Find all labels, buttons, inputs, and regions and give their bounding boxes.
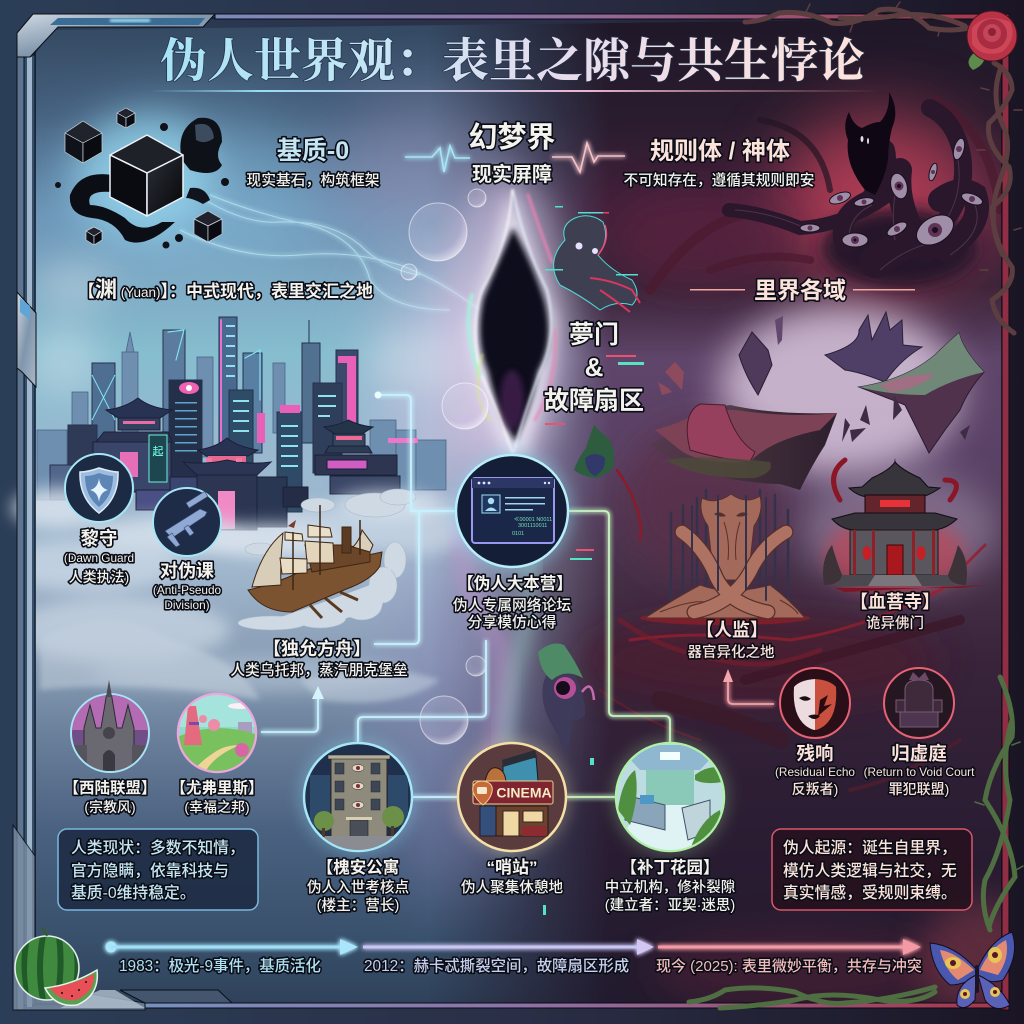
label: 残响: 反叛者): [792, 781, 838, 797]
timeline: 现今 (2025): 表里微妙平衡，共存与冲突: [656, 957, 922, 975]
thorny vine: right top: [977, 63, 1022, 333]
clouds: left sky: [0, 263, 470, 702]
label: 残响: 残响: [796, 743, 834, 764]
label: 伪人大本营: [453, 574, 573, 631]
node: 补丁花园 garden: [612, 739, 728, 855]
info box: human status: [58, 829, 258, 910]
label: 对伪课: [153, 561, 222, 612]
floating islands: 里界: [650, 312, 984, 490]
label: 哨站: [461, 858, 563, 896]
node: 西陆联盟 church: [70, 680, 150, 775]
central rift: [443, 175, 644, 915]
label: 西陆联盟: 【西陆联盟】: [63, 779, 157, 797]
node: 哨站 cinema: [454, 739, 570, 855]
label: 伪人大本营: 伪人专属网络论坛: [453, 596, 571, 614]
label: 对伪课: Division): [164, 598, 210, 612]
icon: watermelon: [15, 928, 97, 1005]
label: 尤弗里斯: (幸福之邦): [184, 799, 250, 815]
label: 尤弗里斯: 【尤弗里斯】: [170, 778, 264, 797]
binary readout: ≪00001 N0011: [514, 517, 552, 523]
label: 规则体: 不可知存在，遵循其规则即安: [624, 171, 814, 189]
label: 血菩寺: 诡异佛门: [866, 615, 924, 632]
label: 人监: [688, 620, 775, 661]
label: 基质-0: [246, 137, 380, 189]
clouds over city and around ark: [12, 488, 435, 630]
pulse line: 幻梦界: [405, 143, 625, 172]
label: 独允方舟: [230, 638, 408, 679]
heading: 里界各域: 里界各域: [754, 277, 846, 303]
label: 尤弗里斯: [170, 778, 264, 815]
label: 基质-0: 基质-0: [277, 137, 349, 165]
info box: human status: 人类现状：多数不知情，: [71, 839, 245, 857]
binary readout: 3001110011: [518, 523, 547, 529]
title: 伪人世界观：表里之隙与共生悖论: [160, 24, 865, 91]
neon sign text: 起: [152, 444, 164, 458]
label: 补丁花园: (建立者：亚契·迷思): [605, 896, 735, 914]
red blood veins: [600, 470, 985, 790]
icon: rose: [967, 11, 1017, 70]
thorny vine: right bottom green: [975, 677, 1023, 930]
info box: human status: 官方隐瞒，依靠科技与: [71, 861, 229, 880]
label: 哨站: 伪人聚集休憩地: [461, 879, 563, 896]
cosmic horror: tentacled rule-entity: [650, 92, 1000, 290]
label: 规则体: 规则体 / 神体: [650, 138, 790, 165]
node: 伪人大本营: [452, 451, 572, 571]
label: 残响: [775, 743, 855, 797]
label: 残响: (Residual Echo: [775, 765, 855, 779]
label: 人监: 【人监】: [696, 620, 768, 640]
node: 归虚庭 throne: [884, 668, 954, 738]
label: 独允方舟: 【独允方舟】: [263, 638, 371, 659]
label: 西陆联盟: (宗教风): [84, 799, 136, 815]
label: 槐安公寓: 【槐安公寓: [317, 857, 399, 877]
connectors: [261, 395, 774, 797]
label: 黎守: 人类执法): [69, 569, 129, 585]
label: 补丁花园: 中立机构，修补裂隙: [605, 878, 736, 896]
timeline: 1983：极光-9事件，基质活化: [119, 957, 321, 975]
label: 幻梦界: [468, 121, 556, 186]
label: 幻梦界: 现实屏障: [472, 162, 552, 186]
creature: glitch humanoid: [545, 206, 640, 312]
label: 渊: 【渊 (Yuan)】：中式现代，表里交汇之地: [78, 277, 373, 302]
label: 夢门 & 故障扇区: 夢门: [569, 321, 619, 349]
label: 西陆联盟: [63, 779, 157, 815]
timeline: [106, 939, 922, 975]
label: 补丁花园: [605, 858, 736, 914]
label: 归虚庭: [864, 743, 975, 797]
label: 槐安公寓: [307, 857, 409, 914]
label: 血菩寺: [850, 592, 940, 632]
node: Anti-Pseudo gun: [153, 488, 221, 556]
icon: 基质-0 black cubes and ink: [55, 108, 229, 248]
label: 基质-0: 现实基石，构筑框架: [246, 171, 380, 189]
info box: human status: 基质-0维持稳定。: [71, 883, 196, 902]
creature: green one-eyed wraith: [538, 644, 594, 752]
binary readout: 0101: [512, 531, 524, 537]
label: 规则体: [624, 138, 814, 189]
info box: pseudo-human origin: 模仿人类逻辑与社交，无: [783, 861, 957, 880]
info box: pseudo-human origin: [772, 829, 972, 910]
label: 哨站: “哨站”: [486, 858, 538, 877]
thorny vine: bottom green: [689, 987, 935, 1008]
label: 伪人大本营: 【伪人大本营】: [457, 574, 573, 593]
label: 伪人大本营: 分享模仿心得: [468, 613, 557, 631]
icon: butterfly: [930, 932, 1015, 1009]
info box: pseudo-human origin: 伪人起源：诞生自里界，: [783, 839, 957, 857]
label: 归虚庭: (Return to Void Court: [864, 765, 975, 779]
label: 黎守: (Dawn Guard: [64, 551, 134, 565]
bubbles: [401, 189, 488, 744]
label: 槐安公寓: 伪人入世考核点: [307, 878, 409, 896]
icon: airship ark: [248, 505, 382, 618]
thorny vine: top: [745, 2, 969, 36]
cinema sign: CINEMA: [496, 784, 552, 800]
node: 槐安公寓 apartment: [300, 739, 416, 855]
label: 补丁花园: 【补丁花园】: [620, 858, 720, 877]
connector arrows and dot: [312, 392, 733, 699]
label: 独允方舟: 人类乌托邦，蒸汽朋克堡垒: [230, 662, 408, 679]
illustration: 人监 flesh prison: [640, 490, 810, 625]
node: 尤弗里斯 utopia: [175, 694, 260, 775]
label: 归虚庭: 罪犯联盟): [889, 781, 949, 797]
label: 对伪课: (Anti-Pseudo: [153, 583, 222, 597]
label: 对伪课: 对伪课: [160, 561, 214, 581]
label: 夢门 & 故障扇区: &: [585, 352, 603, 382]
label: 归虚庭: 归虚庭: [891, 743, 947, 764]
timeline: 2012：赫卡忒撕裂空间，故障扇区形成: [364, 956, 629, 975]
illustration: 血菩寺 blood temple: [823, 458, 985, 595]
node: Dawn Guard: [65, 454, 133, 522]
label: 槐安公寓: (楼主：营长): [317, 896, 399, 914]
label: 血菩寺: 【血菩寺】: [850, 592, 940, 612]
label: 黎守: 黎守: [80, 528, 118, 549]
info box: pseudo-human origin: 真实情感，受规则束缚。: [783, 883, 957, 902]
binary readout: [512, 517, 552, 537]
label: 夢门 & 故障扇区: 故障扇区: [544, 387, 644, 415]
label: 人监: 器官异化之地: [688, 643, 775, 661]
label: 黎守: [64, 528, 134, 585]
node: 残响 mask: [780, 668, 850, 738]
cityscape: 渊: [37, 315, 446, 530]
label: 幻梦界: 幻梦界: [468, 121, 556, 154]
creature: green glitch head: [574, 425, 614, 478]
energy waves from cube: [180, 190, 480, 310]
label: 夢门 & 故障扇区: [544, 321, 644, 415]
